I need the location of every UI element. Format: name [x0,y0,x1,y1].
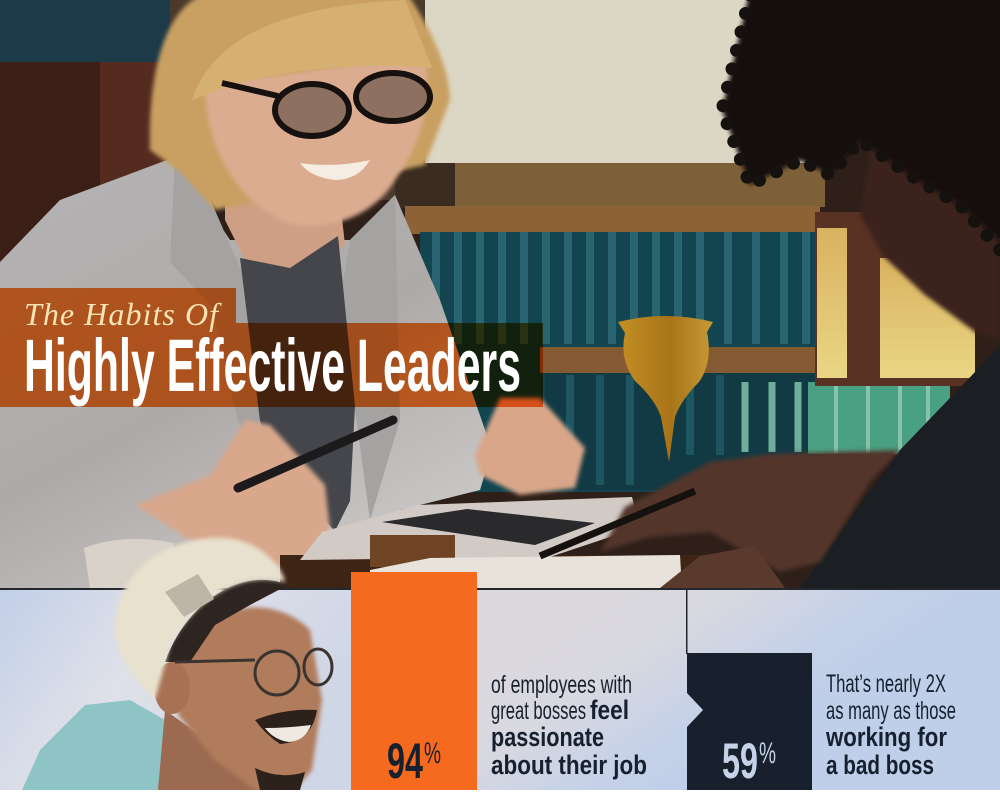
jacket [22,700,164,790]
mug [84,539,174,588]
text: 94% description: great bosses [491,697,586,725]
face [175,607,322,790]
stat bar: 59% with arrow notch [687,653,812,790]
text: 59% description: a bad boss [826,750,934,780]
background: booth and wall [0,0,825,262]
woman: face [205,55,427,226]
stat bar: 94% [351,572,477,790]
kicker: The Habits Of [24,296,222,332]
background: teal panelling [420,232,820,492]
woman: knit top [240,236,355,531]
woman: hair back [150,0,450,210]
headline: Highly Effective Leaders [24,324,521,407]
stat bar: 59% with arrow notch: % [759,737,776,770]
text: 94% description: of employees with [491,671,632,699]
text: 59% description: working for [825,722,947,752]
woman: right hand with pen [135,420,393,570]
text: 94% description: about their job [491,750,647,780]
woman: neck and chest [225,200,345,268]
paper sheet [370,555,682,588]
right person: curly hair [722,0,1000,250]
right person: arm and hand [600,450,900,572]
right person: face [859,152,1000,338]
background: amber glass vase [618,316,713,462]
woman: smile [300,160,370,180]
separator line [686,590,688,654]
text: 94% description: feel [590,695,629,725]
woman: blazer [0,157,492,588]
pen on notebook [540,491,695,556]
ear [154,662,190,714]
portrait: man in beanie [22,538,332,790]
woman: fringe [192,0,432,100]
background: table lamp [808,212,975,454]
stat bar: 94%: 94 [387,733,423,789]
beard and smile [255,710,317,790]
photo: two leaders in a meeting [0,0,1000,588]
text: 94% description: passionate [491,722,604,752]
stat bar: 59% with arrow notch: 59 [722,733,758,789]
beanie label [165,574,214,617]
banner ribbons [0,288,543,407]
notebook and phone [300,497,640,567]
woman: glasses [222,73,430,136]
text: 59% description [825,670,956,780]
woman: lapels [170,157,400,520]
table [280,555,700,588]
glasses [175,649,332,695]
neck [158,710,265,790]
text: 94% description [491,671,647,780]
stat bar: 94%: % [424,737,441,770]
title banner [0,288,543,407]
divider line [0,588,1000,590]
woman: left hand [475,398,585,495]
hair [165,580,288,662]
right person: shirt [800,345,1000,588]
stats panel [0,538,1000,792]
beanie [115,538,285,700]
